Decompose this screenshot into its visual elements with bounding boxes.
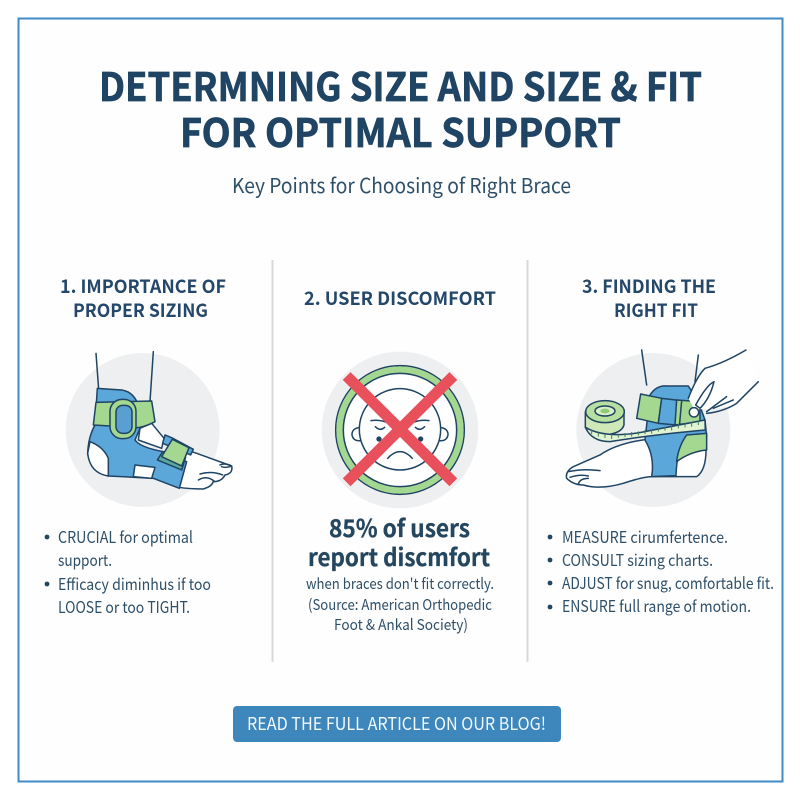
heading: right fit: 3. FINDING THE [582, 273, 716, 299]
heading: proper sizing: PROPER SIZING [73, 297, 208, 323]
title: DETERMNING SIZE AND SIZE & FIT [99, 57, 702, 113]
title [99, 57, 702, 159]
bullet list: proper sizing: support. [58, 547, 112, 571]
bullet list: right fit [548, 524, 774, 617]
subtitle: Key Points for Choosing of Right Brace [232, 169, 571, 199]
source note [306, 573, 494, 635]
heading: right fit [582, 273, 716, 323]
bullet list: proper sizing: Efficacy diminhus if too [58, 571, 211, 595]
panel: importance of proper sizing [45, 273, 232, 618]
bullet list: proper sizing: LOOSE or too TIGHT. [58, 594, 190, 618]
heading: user discomfort: 2. USER DISCOMFORT [304, 285, 496, 311]
source note: when braces don't fit correctly. [306, 573, 494, 594]
bullet list: right fit: MEASURE cirumfertence. [562, 524, 728, 548]
button: read the article: READ THE FULL ARTICLE ON OUR BLOG! [247, 711, 546, 736]
panel: user discomfort [304, 285, 496, 635]
bullet list: right fit: CONSULT sizing charts. [562, 547, 713, 571]
bullet list: proper sizing [45, 524, 211, 618]
title: FOR OPTIMAL SUPPORT [180, 103, 621, 159]
heading: proper sizing: 1. IMPORTANCE OF [60, 273, 226, 299]
bullet list: right fit: ENSURE full range of motion. [562, 593, 751, 617]
icon: hand measuring ankle with tape [566, 350, 758, 507]
panel: finding the right fit [548, 273, 774, 617]
heading: proper sizing [60, 273, 226, 323]
icon: crossed-out sad face [322, 352, 478, 508]
icon: ankle brace on foot [66, 352, 232, 507]
statistic: 85% report discomfort [308, 509, 490, 573]
source note: (Source: American Orthopedic [308, 594, 492, 615]
source note: Foot & Ankal Society) [334, 614, 468, 635]
statistic: 85% report discomfort: report discmfort [308, 538, 490, 573]
bullet list: proper sizing: CRUCIAL for optimal [58, 524, 193, 548]
button: read the article [233, 706, 561, 742]
heading: right fit: RIGHT FIT [614, 297, 698, 323]
statistic: 85% report discomfort: 85% of users [329, 509, 470, 544]
